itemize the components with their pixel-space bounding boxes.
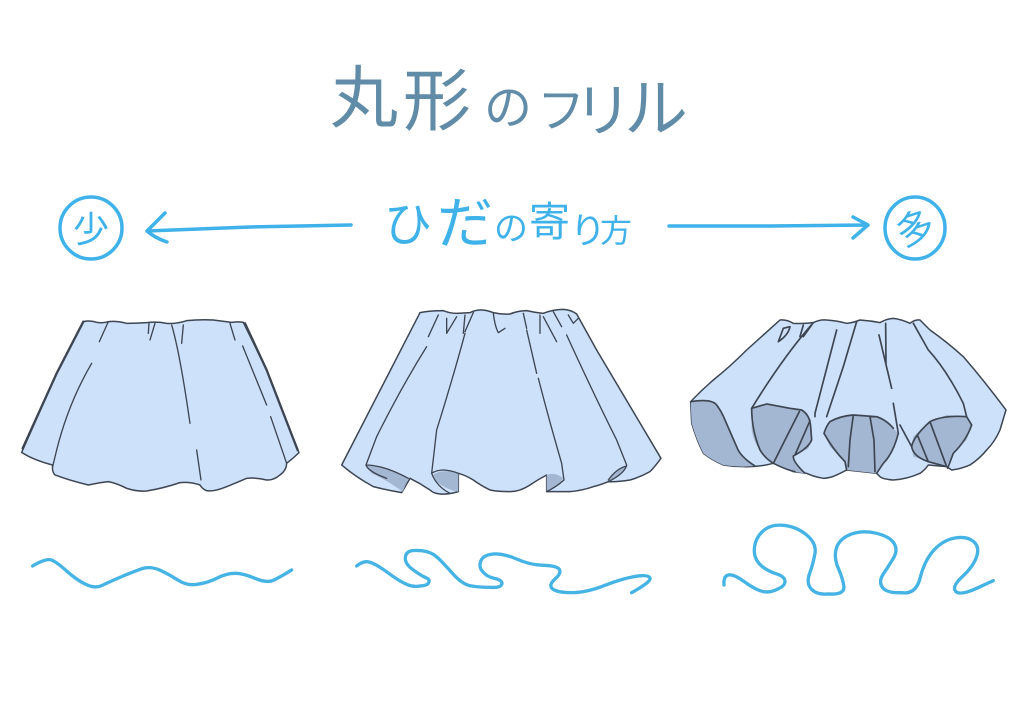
wave: medium gathers [357,550,650,593]
wave: many gathers [724,525,993,594]
icon: many marker [885,197,945,259]
subtitle: how the gathers form: り [570,210,606,251]
title: 丸 [330,61,398,137]
subtitle: how the gathers form: ひ [384,199,432,252]
skirt: few gathers [22,320,299,491]
subtitle: how the gathers form: 寄 [529,199,570,245]
skirt: many gathers [691,318,1006,480]
subtitle: how the gathers form: の [494,210,528,248]
icon: few marker [60,197,122,259]
icon: few marker: 少 [73,209,109,250]
title: リ [574,79,632,144]
arrow: toward many [669,217,868,238]
title: ル [624,73,688,145]
subtitle: how the gathers form: 方 [600,213,632,249]
subtitle: how the gathers form: だ [437,192,493,255]
skirt: medium gathers [342,309,661,494]
icon: many marker: 多 [891,204,940,256]
title: 形 [403,64,471,140]
arrow: toward few [147,213,351,242]
title: の [484,82,532,135]
wave: few gathers [33,560,292,587]
title: フ [537,85,585,138]
